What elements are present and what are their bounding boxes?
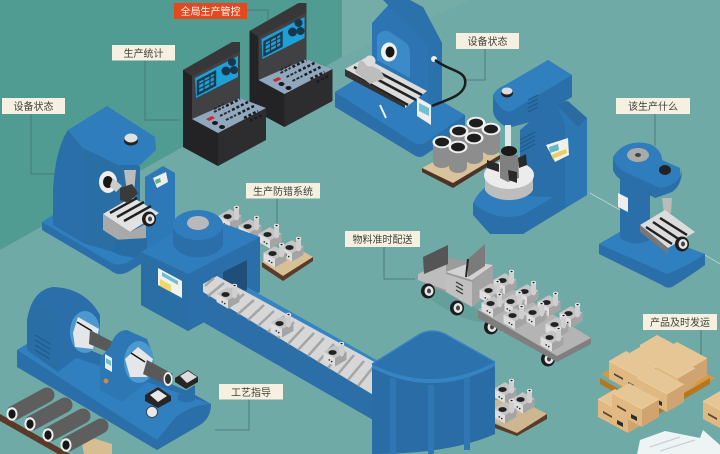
panel <box>546 138 569 162</box>
belt upper edge <box>247 287 380 368</box>
label: 该生产什么 <box>616 98 690 114</box>
column <box>620 172 650 244</box>
top cap <box>68 106 156 165</box>
right wall <box>342 0 470 57</box>
table <box>103 197 159 232</box>
base <box>599 226 705 288</box>
label: 生产统计 <box>112 45 175 60</box>
column <box>372 0 442 108</box>
label: 工艺指导 <box>219 384 283 400</box>
screen <box>158 268 182 298</box>
label: 全局生产管控 <box>174 3 247 19</box>
machine left <box>42 106 175 274</box>
small tray near hopper <box>490 379 547 436</box>
label: 生产防错系统: 生产防错系统 <box>253 185 313 198</box>
tool posts <box>178 385 195 402</box>
tunnel opening <box>223 260 247 290</box>
drill machine right <box>599 143 705 288</box>
label: 设备状态 left: 设备状态 <box>14 100 54 113</box>
small gauges and screen <box>105 354 112 372</box>
lathe <box>17 287 211 450</box>
panel tower <box>145 166 175 255</box>
striped table <box>345 58 427 108</box>
belt side <box>203 292 380 424</box>
tablet <box>417 97 431 125</box>
milling machine top <box>335 0 465 157</box>
label: 全局生产管控: 全局生产管控 <box>180 5 240 18</box>
pallets with boxes <box>598 335 720 435</box>
label: 工艺指导: 工艺指导 <box>231 386 271 399</box>
paper stack <box>637 430 720 454</box>
parts on belt <box>217 284 239 308</box>
base <box>42 192 175 274</box>
tray of cups <box>422 117 500 188</box>
parts tray <box>219 206 313 281</box>
drill press center right <box>473 60 587 234</box>
column under <box>113 238 147 257</box>
left wall <box>0 0 342 250</box>
label: 设备状态 left <box>2 98 65 114</box>
base <box>17 342 211 450</box>
label: 产品及时发运 <box>643 314 717 330</box>
hopper <box>372 331 495 454</box>
spindle <box>505 125 511 150</box>
forklift <box>418 244 493 328</box>
base <box>335 65 465 157</box>
label: 生产统计: 生产统计 <box>124 47 164 60</box>
chuck <box>485 175 533 200</box>
headstock <box>27 287 100 372</box>
label: 设备状态 top: 设备状态 <box>468 35 508 48</box>
tag <box>618 193 628 212</box>
spindle <box>124 170 136 192</box>
tube tray <box>0 388 112 454</box>
label: 生产防错系统 <box>246 183 320 198</box>
body <box>473 100 587 234</box>
label: 该生产什么: 该生产什么 <box>628 100 678 113</box>
top cylinder <box>173 225 223 257</box>
cart with parts <box>478 270 591 366</box>
chuck ring <box>99 171 117 193</box>
label: 物料准时配送 <box>345 231 420 247</box>
second head <box>100 330 153 402</box>
machine housing <box>141 215 260 331</box>
port and cable <box>431 56 437 62</box>
belt surface <box>203 276 380 399</box>
label: 设备状态 top <box>456 33 519 49</box>
body side <box>53 130 83 243</box>
console 2 <box>250 3 332 127</box>
conveyor <box>141 210 380 424</box>
console 1 <box>183 42 266 166</box>
arm <box>493 60 572 128</box>
table <box>640 210 695 248</box>
label: 物料准时配送: 物料准时配送 <box>352 233 412 246</box>
label: 产品及时发运: 产品及时发运 <box>650 316 710 329</box>
